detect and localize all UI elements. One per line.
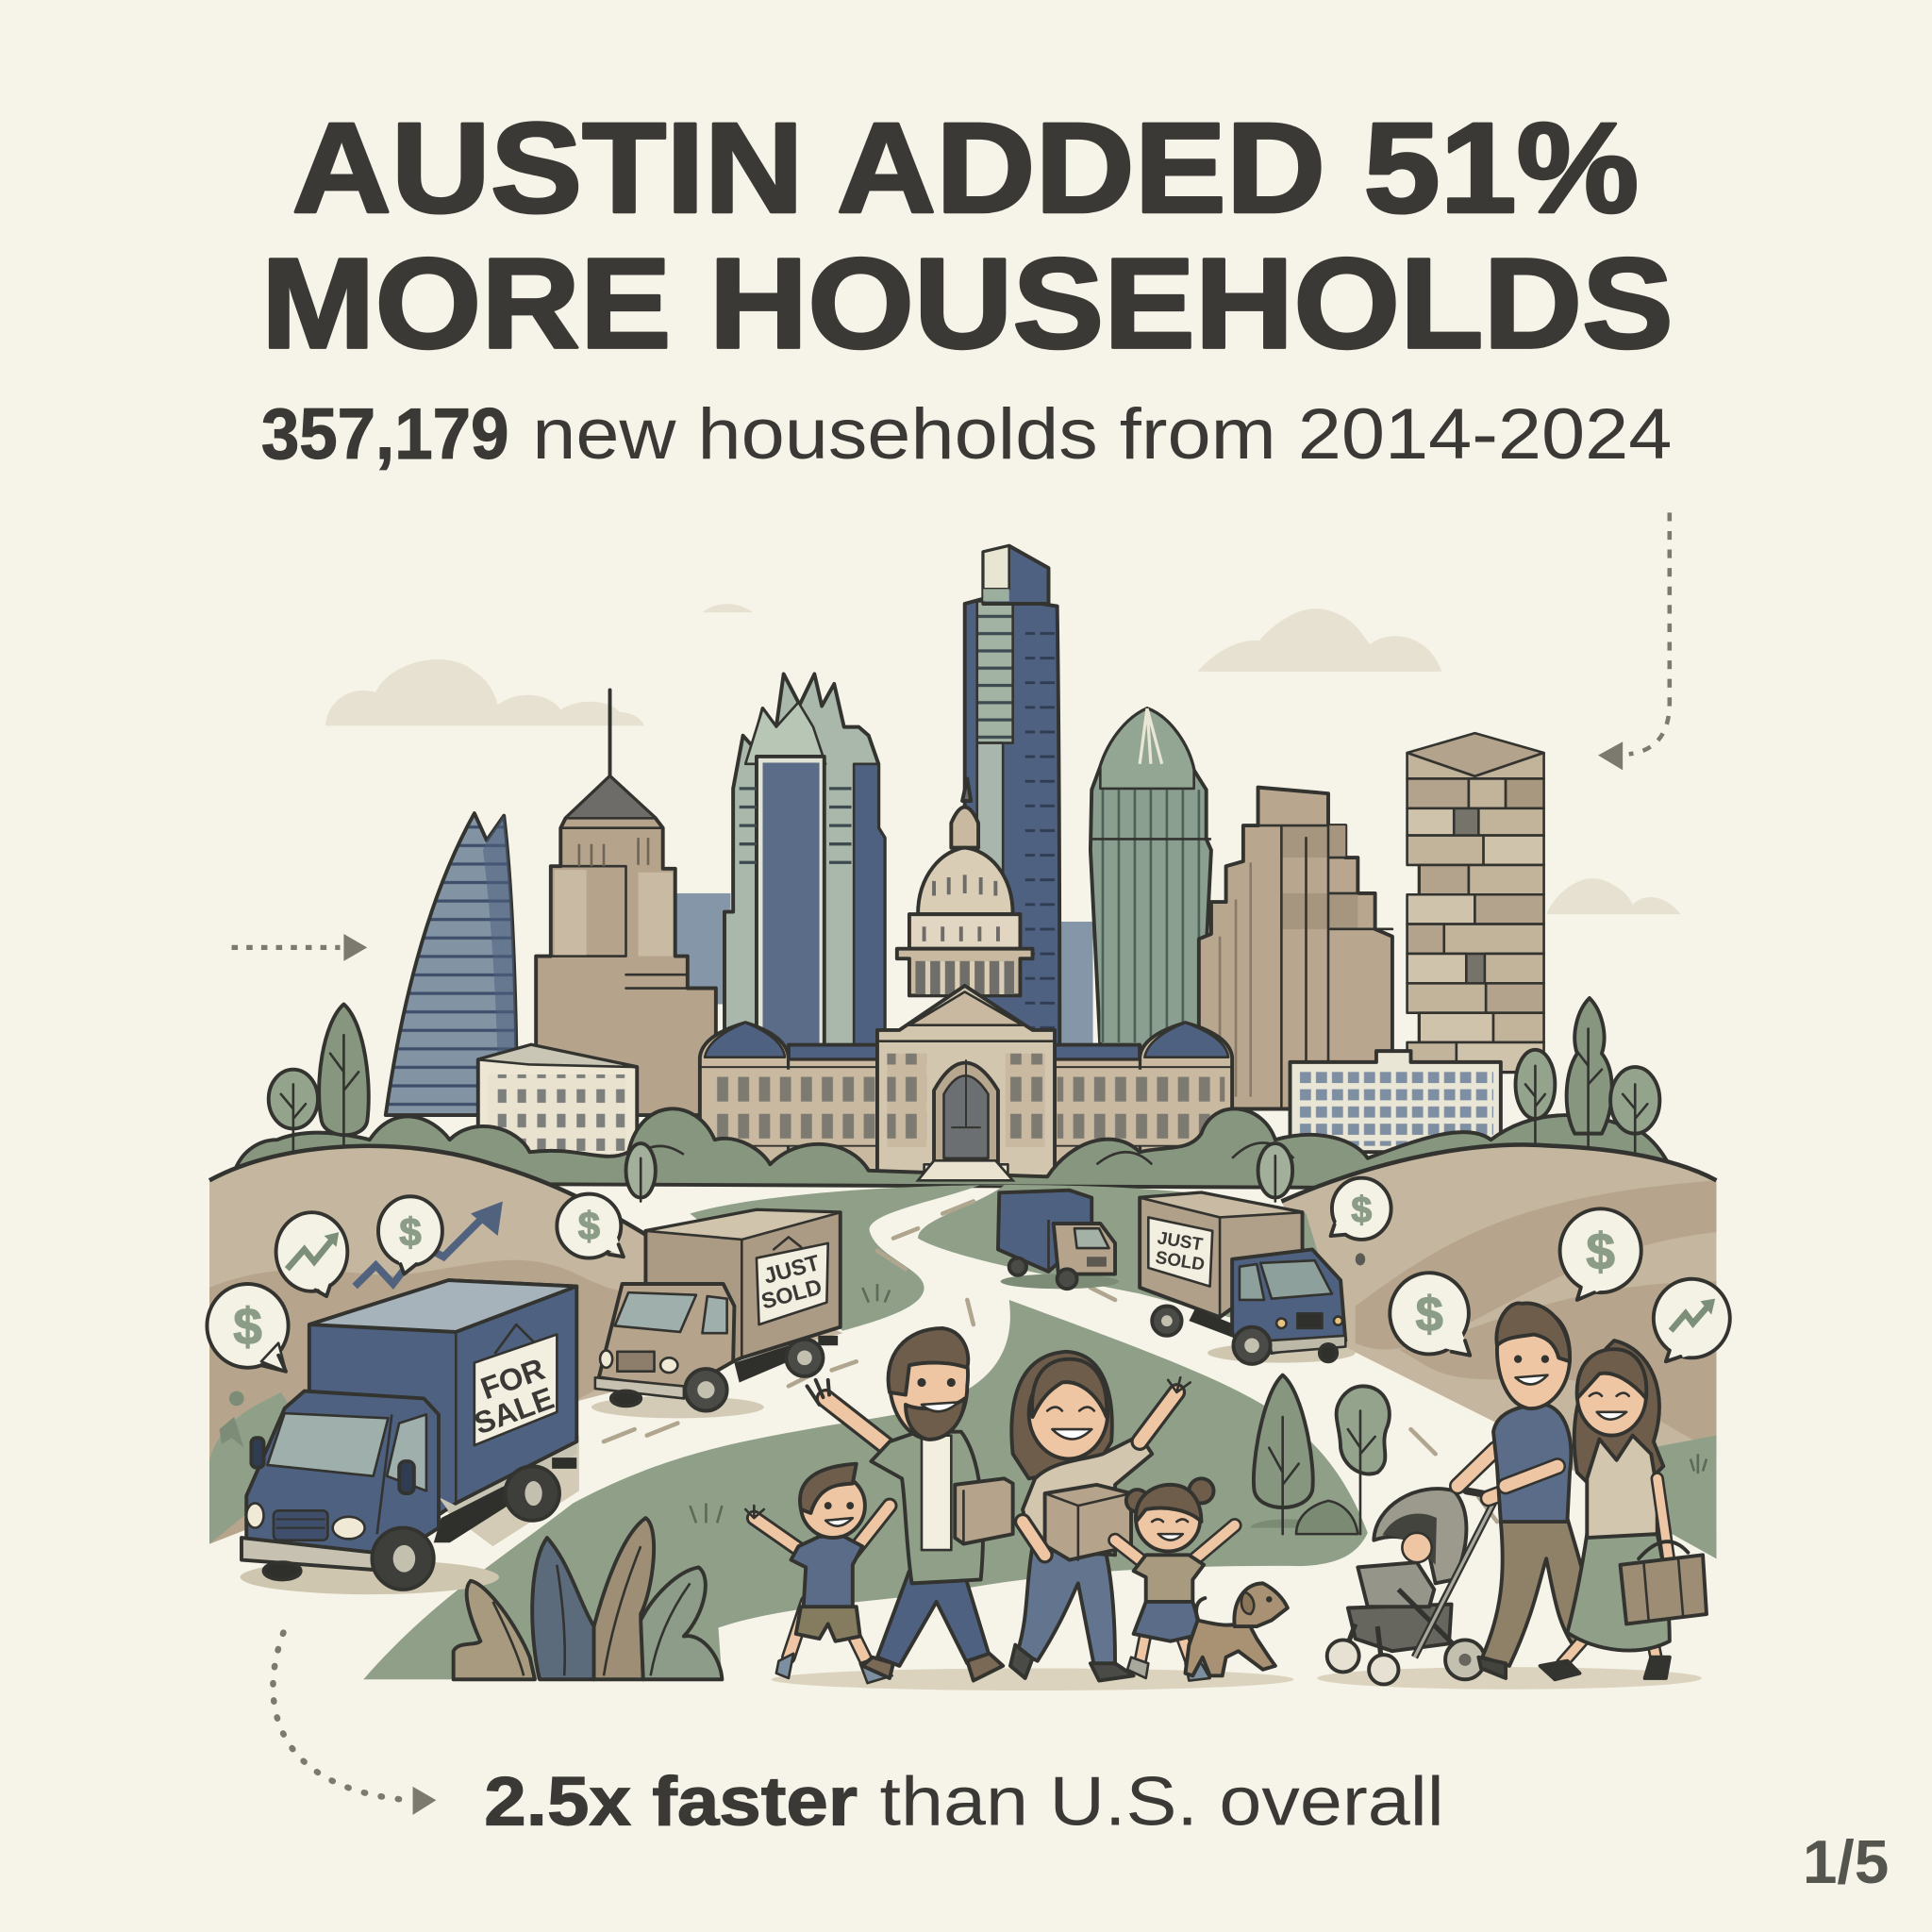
- building: spiked crown tower: [724, 674, 885, 1047]
- family: right group: [1327, 1303, 1707, 1684]
- tree: round left: [269, 1070, 318, 1158]
- decorative figure stains on hills: [219, 1253, 1365, 1448]
- truck: just sold tan: [591, 1210, 841, 1418]
- grass tufts: [690, 1284, 1707, 1523]
- building: stacked block tower: [1407, 733, 1544, 1072]
- truck: small navy distant: [998, 1191, 1119, 1289]
- girl: [1115, 1478, 1235, 1681]
- bubble: dollar 2: $: [399, 1209, 422, 1254]
- left and right wings: [700, 1023, 1232, 1176]
- bubble: dollar 5: [1390, 1273, 1470, 1356]
- sign: for sale: [469, 1335, 558, 1445]
- building: curved glass sail: [386, 813, 516, 1115]
- mom: [1010, 1352, 1191, 1681]
- sign: just sold: [757, 1243, 828, 1324]
- bubble: dollar 2: [378, 1196, 442, 1274]
- arrow: dotted top right: [1598, 512, 1670, 770]
- box: [955, 1478, 1013, 1544]
- family: left group: [745, 1328, 1288, 1683]
- dad 2: [1457, 1303, 1595, 1678]
- bubble: chart 1: [276, 1212, 347, 1296]
- truck: just sold navy cab: [1140, 1192, 1356, 1364]
- bubble: dollar 5: $: [1416, 1288, 1443, 1342]
- dad: [808, 1328, 1013, 1681]
- building: stepped tan tower: [1199, 788, 1392, 1109]
- sign: just sold: JUST: [1156, 1228, 1205, 1256]
- tree: tall right: [1567, 998, 1612, 1152]
- landscape: [209, 1144, 1716, 1679]
- building: low glass block right: [1291, 1051, 1501, 1152]
- central pavilion: [877, 986, 1055, 1176]
- title: MORE HOUSEHOLDS: [261, 231, 1674, 375]
- green meadow behind road: [690, 1185, 1347, 1348]
- stroller: [1327, 1489, 1501, 1684]
- building: tall central tower: [965, 546, 1059, 1047]
- clouds: [325, 604, 1681, 914]
- caption: [484, 1763, 1444, 1840]
- mom 2: [1541, 1341, 1707, 1679]
- subtitle: 357,179: [261, 394, 508, 475]
- hills: right: [1281, 1144, 1716, 1558]
- bubble: dollar 1: [207, 1284, 289, 1372]
- sign: just sold: SOLD: [758, 1274, 824, 1314]
- plant: foreground leaves: [454, 1518, 722, 1679]
- box: [1045, 1485, 1131, 1560]
- trees and hedges: [232, 998, 1678, 1201]
- truck: for sale navy: [241, 1280, 579, 1594]
- building: low cream block left: [478, 1045, 637, 1158]
- bubble: dollar 6: [1560, 1208, 1641, 1300]
- bubble: dollar 4: $: [1351, 1191, 1372, 1231]
- sign: just sold: [1148, 1217, 1212, 1287]
- building: green domed tower: [1091, 708, 1211, 1047]
- trees: foreground: [1251, 1375, 1390, 1534]
- sign: for sale: SALE: [469, 1380, 558, 1441]
- growth arrow: [355, 1201, 503, 1287]
- building: spire tower: [536, 690, 716, 1115]
- small foreground trees: [626, 1143, 1292, 1201]
- sign: just sold: SOLD: [1154, 1248, 1206, 1275]
- background blue blocks: [675, 893, 1093, 1045]
- title: AUSTIN ADDED 51%: [292, 96, 1639, 240]
- boy: [745, 1464, 892, 1683]
- bubble: dollar 1: $: [233, 1297, 262, 1356]
- tree: small right: [1516, 1050, 1555, 1148]
- steps: [918, 1160, 1013, 1180]
- capitol building: [700, 778, 1232, 1176]
- money bubbles and growth arrow: [207, 1178, 1730, 1372]
- title: [261, 96, 1674, 375]
- arrow: dotted bottom left: [273, 1633, 436, 1815]
- ground shadows: [772, 1667, 1702, 1690]
- road dashes: [604, 1201, 1497, 1522]
- hedge row: [232, 1108, 1678, 1189]
- caption: than U.S. overall: [880, 1763, 1444, 1840]
- dog: [1185, 1583, 1288, 1675]
- skyline: [386, 546, 1544, 1158]
- tree: round right: [1610, 1067, 1659, 1158]
- sign: just sold: JUST: [761, 1250, 823, 1289]
- bubble: dollar 4: [1331, 1178, 1391, 1240]
- bubble: chart 2: [1654, 1279, 1730, 1361]
- tree: tall left: [319, 1004, 369, 1158]
- bubble: dollar 6: $: [1586, 1222, 1615, 1280]
- caption: 2.5x faster: [484, 1763, 858, 1840]
- page number: 1/5: [1803, 1827, 1889, 1896]
- suitcase: [1621, 1541, 1707, 1624]
- green field foreground: [363, 1300, 1368, 1679]
- arrow: dotted left: [232, 934, 367, 961]
- hills: left: [209, 1146, 842, 1544]
- dome: [897, 778, 1033, 995]
- bubble: dollar 3: [557, 1194, 624, 1258]
- bubble: dollar 3: $: [578, 1204, 600, 1248]
- sign: for sale: FOR: [476, 1351, 549, 1406]
- subtitle: new households from 2014-2024: [532, 394, 1672, 475]
